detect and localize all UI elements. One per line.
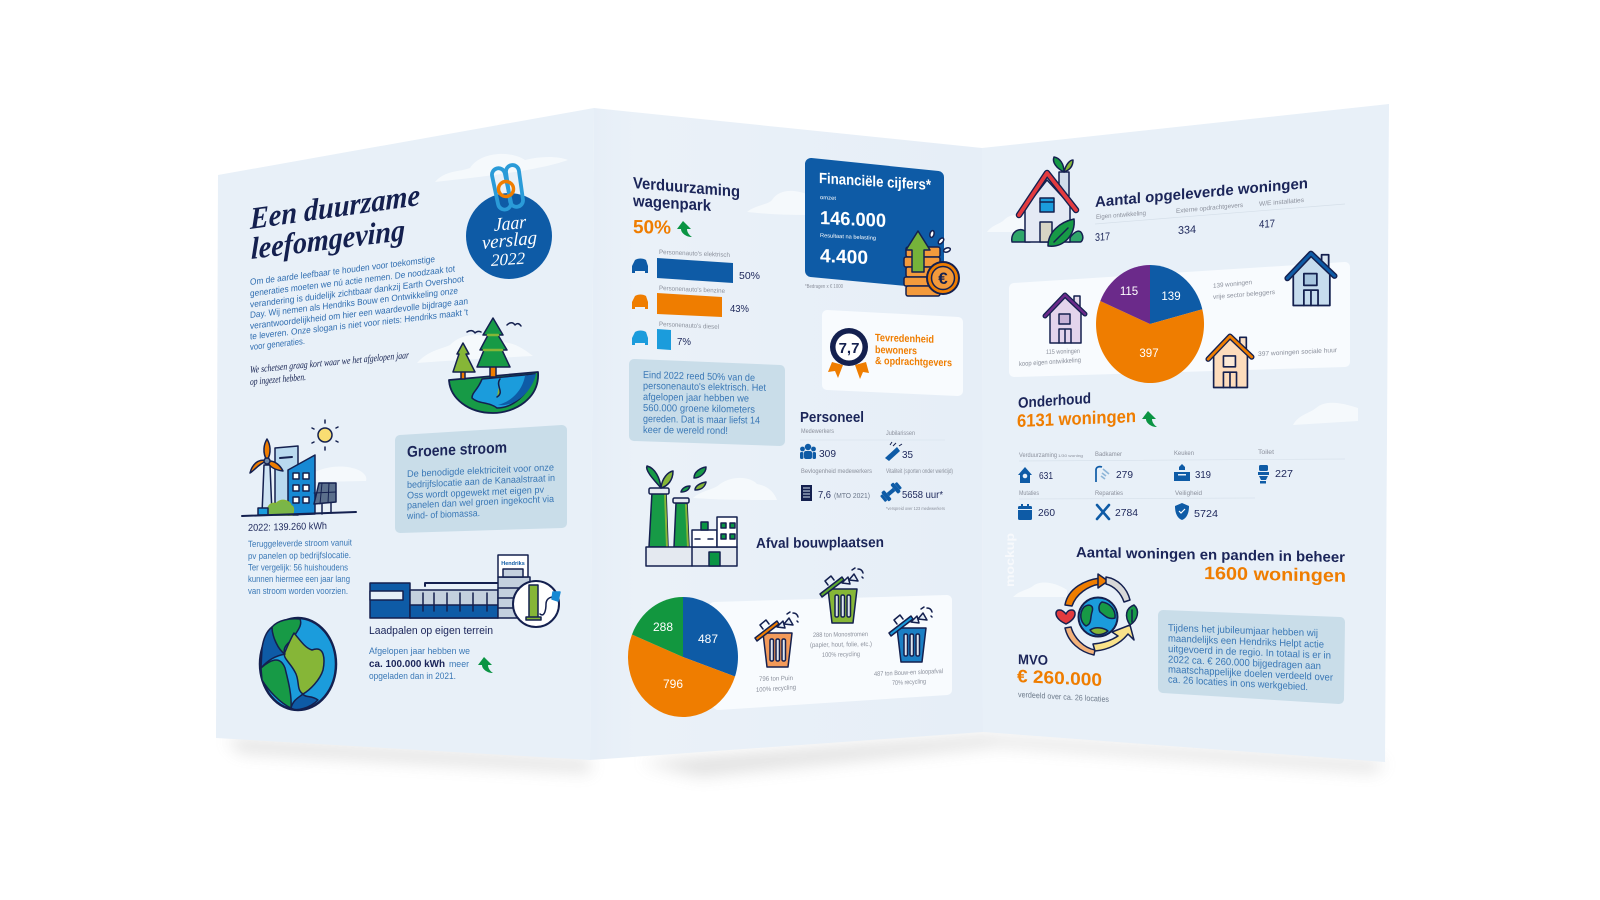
panel: Financiële cijfers: 146.000 [820, 208, 886, 232]
title: Een duurzame [249, 177, 420, 236]
title: leefomgeving [251, 212, 405, 266]
title [249, 177, 420, 266]
text: Laadpalen: opgeladen dan in 2021. [369, 671, 456, 682]
bar chart: wagenpark: Personenauto's diesel [659, 321, 720, 331]
badge: Jaarverslag 2022: 2022 [491, 249, 525, 270]
section: Personeel: *verspreid over 123 medewerkers [886, 506, 946, 511]
bar chart: wagenpark [632, 249, 760, 350]
icon: growth arrow [478, 657, 493, 673]
text: Laadpalen: Laadpalen op eigen terrein [369, 625, 493, 637]
section: Personeel: Vitaliteit (sporten onder werktijd) [886, 469, 953, 475]
panel: right page [982, 104, 1389, 762]
waste labels [756, 631, 943, 694]
heading: woningen in beheer: 1600 woningen [1204, 563, 1346, 586]
badge: Jaarverslag 2022 [466, 164, 552, 279]
section: Personeel: 5658 uur* [902, 489, 943, 501]
panel: Financiële cijfers: Resultaat na belasting [820, 233, 876, 242]
intro text: Om de aarde leefbaar te houden voor toekomstige [250, 254, 435, 287]
watermark: mockup: mockup [1003, 533, 1017, 587]
waste labels: 796 ton Puin [759, 675, 793, 683]
stats: opgeleverde woningen: 317 [1095, 231, 1110, 244]
intro text: verandering is duidelijk zichtbaar dankzij Earth Overshoot [250, 274, 464, 309]
bar chart: wagenpark: 7% [677, 336, 691, 348]
icon: dumbbell [879, 480, 903, 504]
icon: calendar [1018, 504, 1032, 520]
heading: Afval bouwplaatsen: Afval bouwplaatsen [756, 535, 884, 552]
text: Laadpalen [369, 625, 493, 682]
panel: Hendriks Helpt note: ca. 26 locaties in ons werkgebied. [1168, 675, 1308, 693]
table: onderhoud [1018, 450, 1345, 520]
table: onderhoud: Toilet [1258, 450, 1274, 456]
text: energy return: kunnen hiermee een jaar lang [248, 574, 350, 584]
icon: survey document [801, 485, 812, 501]
text: energy return [248, 521, 352, 596]
icon: shield [1175, 503, 1189, 520]
panel: electric kilometres note: 560.000 groene kilometers [643, 403, 755, 416]
waste labels: 100% recycling [756, 684, 796, 694]
panel: Groene stroom: Oss wordt opgewekt met eigen pv [407, 485, 544, 501]
heading: Onderhoud [1017, 390, 1136, 431]
icon: coins with arrow: € [938, 269, 948, 288]
heading: MVO: € 260.000 [1017, 666, 1102, 690]
icon: growth arrow [1142, 411, 1157, 427]
table: onderhoud: 1/30 woning [1058, 453, 1083, 458]
badge: Jaarverslag 2022: Jaar [494, 212, 527, 236]
table: onderhoud: Keuken [1174, 451, 1194, 457]
pie chart: waste [628, 597, 738, 717]
panel: Groene stroom: Groene stroom [407, 440, 507, 461]
heading: Onderhoud: 6131 woningen [1017, 406, 1136, 431]
panel: Hendriks Helpt note: 2022 ca. € 260.000 bijgedragen aan [1168, 655, 1321, 672]
heading: Verduurzaming wagenpark: wagenpark [632, 193, 711, 215]
table: onderhoud: 227 [1275, 468, 1293, 480]
panel: Groene stroom [400, 430, 562, 528]
pie chart: waste: 288 [653, 620, 673, 634]
icon: bath [1174, 464, 1190, 481]
icon: sustainable house [1012, 157, 1083, 246]
panel: housing types [1014, 254, 1345, 388]
section: Personeel [800, 409, 953, 511]
pie chart: waste: 796 [663, 677, 683, 691]
table: onderhoud: 319 [1195, 469, 1211, 481]
panel: middle page [590, 108, 983, 760]
text: energy return: van stroom worden voorzien. [248, 586, 348, 596]
panel: waste [628, 568, 947, 717]
pie chart: waste: 487 [698, 632, 718, 646]
panel: Hendriks Helpt note: maatschappelijke doelen verdeeld over [1168, 665, 1334, 684]
pie chart: housing: 397 [1139, 348, 1159, 360]
panel: Hendriks Helpt note: uitgevoerd in de regio. In totaal is er in [1168, 644, 1331, 662]
panel: electric kilometres note [634, 364, 780, 441]
panel: Groene stroom: bedrijfslocatie aan de Kanaalstraat in [407, 473, 555, 491]
panel: left page [216, 108, 594, 760]
icon: electric car [632, 258, 648, 273]
italic note [250, 350, 409, 388]
section: Personeel: 309 [819, 448, 836, 460]
section: Personeel: 35 [902, 449, 913, 461]
icon: rating rosette: 7,7 [839, 340, 859, 357]
panel: electric kilometres note: keer de wereld rond! [643, 425, 728, 437]
icon: green factory [646, 466, 737, 566]
icon: champagne [885, 442, 902, 461]
decorative clouds [315, 154, 1358, 597]
icon: coins with arrow [904, 230, 959, 296]
panel: electric kilometres note: gereden. Dat is maar liefst 14 [643, 414, 760, 427]
bar chart: wagenpark: 50% [739, 270, 760, 282]
pie chart: housing: 115 [1120, 286, 1138, 298]
text: Laadpalen: ca. 100.000 kWh [369, 659, 445, 670]
icon: orange bin [755, 612, 798, 667]
table: onderhoud: 5724 [1194, 508, 1218, 520]
table: onderhoud: Reparaties [1095, 491, 1123, 497]
housing labels: 139 woningen [1213, 279, 1252, 290]
intro text: Day. Wij nemen als Hendriks Bouw en Ontwikkeling onze [250, 285, 458, 320]
icon: purple house [1045, 295, 1085, 343]
housing labels: vrije sector beleggers [1213, 289, 1276, 301]
footnote: bedragen: *Bedragen x € 1000 [805, 284, 843, 290]
icon: toilet [1258, 465, 1269, 484]
housing labels: koop eigen ontwikkeling [1019, 357, 1081, 368]
heading: Verduurzaming wagenpark [632, 174, 740, 239]
icon: MVO cycle [1056, 574, 1137, 655]
section: Personeel: Jubilarissen [886, 431, 915, 437]
stats: opgeleverde woningen: W/E installaties [1259, 197, 1305, 208]
pie chart: housing: 139 [1161, 291, 1181, 303]
panel: Tevredenheid: Tevredenheid [875, 332, 934, 346]
icon: people [800, 444, 816, 459]
stats: opgeleverde woningen: 334 [1178, 224, 1196, 237]
italic note: op ingezet hebben. [250, 372, 306, 388]
panel: Tevredenheid [827, 315, 958, 391]
panel: Groene stroom: wind- of biomassa. [406, 508, 480, 522]
waste labels: 70% recycling [892, 678, 926, 687]
icon: shower [1096, 467, 1109, 482]
panel: electric kilometres note: personenauto's elektrisch. Het [643, 381, 766, 394]
table: onderhoud: Badkamer [1095, 452, 1122, 458]
panel: Tevredenheid: bewoners [875, 344, 917, 357]
text: energy return: Ter vergelijk: 56 huishoudens [248, 562, 348, 572]
heading: MVO [1017, 651, 1109, 704]
icon: petrol car [632, 294, 648, 309]
text: Laadpalen: Afgelopen jaar hebben we [369, 646, 470, 657]
waste labels: 288 ton Monostromen [813, 631, 868, 639]
waste labels: (papier, hout, folie, etc.) [810, 641, 872, 649]
panel: Financiële cijfers: Financiële cijfers* [819, 170, 931, 194]
section: Personeel: Bevlogenheid medewerkers [801, 469, 872, 475]
panel: electric kilometres note: Eind 2022 reed 50% van de [643, 370, 755, 384]
icon: diesel car [632, 330, 648, 345]
intro text [250, 254, 468, 352]
panel: Financiële cijfers: 4.400 [820, 246, 868, 269]
panel: Financiële cijfers [811, 164, 938, 283]
page shadows [226, 735, 1385, 776]
stats: opgeleverde woningen [1095, 197, 1345, 244]
stats: opgeleverde woningen: 417 [1259, 218, 1275, 231]
waste labels: 487 ton Bouw-en sloopafval [874, 668, 943, 678]
icon: Hendriks building with charger: Hendriks [501, 561, 525, 567]
table: onderhoud: Veiligheid [1175, 491, 1202, 497]
table: onderhoud: 260 [1038, 507, 1055, 519]
pie chart: housing [1096, 265, 1204, 383]
heading: woningen in beheer: Aantal woningen en panden in beheer [1076, 545, 1345, 566]
heading: MVO: verdeeld over ca. 26 locaties [1018, 690, 1109, 704]
waste labels: 100% recycling [822, 651, 860, 659]
bar chart: wagenpark: Personenauto's elektrisch [659, 249, 730, 259]
panel: Hendriks Helpt note [1163, 615, 1340, 699]
icon: blue bin [889, 607, 932, 662]
text: energy return: pv panelen op bedrijfslocatie. [248, 550, 351, 561]
table: onderhoud: 631 [1039, 470, 1053, 482]
section: Personeel: (MTO 2021) [834, 493, 870, 500]
panel: electric kilometres note: afgelopen jaar hebben we [643, 392, 749, 405]
panel: Hendriks Helpt note: Tijdens het jubileumjaar hebben wij [1168, 623, 1318, 639]
text: Laadpalen: meer [449, 659, 469, 670]
panel: Groene stroom: De benodigde elektriciteit voor onze [407, 462, 554, 480]
table: onderhoud: 2784 [1115, 507, 1138, 519]
panel: Financiële cijfers: omzet [820, 195, 836, 202]
intro text: voor generaties. [250, 336, 305, 352]
panel: Hendriks Helpt note: maandelijks een Hendriks Helpt actie [1168, 634, 1324, 651]
italic note: We schetsen graag kort waar we het afgelopen jaar [250, 350, 409, 376]
table: onderhoud: Verduurzaming [1019, 453, 1057, 459]
intro text: generaties moeten we nú actie nemen. De noodzaak tot [250, 263, 455, 298]
intro text: verantwoordelijkheid om hier een waardevolle bijdrage aan [250, 296, 468, 331]
icon: blue house [1287, 254, 1335, 305]
housing labels [1019, 279, 1338, 368]
badge: Jaarverslag 2022: verslag [482, 228, 537, 254]
housing labels: 397 woningen sociale huur [1258, 347, 1338, 358]
section: Personeel: Personeel [800, 409, 864, 426]
intro text: te leveren. Onze slogan is niet voor niets: Hendriks maakt 't [250, 307, 468, 341]
icon: green bin [820, 568, 863, 623]
bar chart: wagenpark: Personenauto's benzine [659, 285, 725, 295]
stats: opgeleverde woningen: Externe opdrachtgevers [1176, 202, 1244, 215]
text: energy return: Teruggeleverde stroom vanuit [248, 537, 352, 549]
panel: Groene stroom: panelen dan wel groen ingekocht via [407, 494, 555, 511]
icon: home [1018, 467, 1032, 483]
heading: Verduurzaming wagenpark: 50% [633, 217, 671, 239]
heading: Aantal opgeleverde woningen: Aantal opgeleverde woningen [1095, 175, 1308, 211]
icon: growth arrow [677, 221, 692, 237]
icon: green energy city [242, 420, 356, 516]
section: Personeel: 7,6 [818, 489, 831, 501]
section: Personeel: Medewerkers [801, 429, 834, 435]
icon: Hendriks building with charger [370, 555, 560, 627]
icon: globe [260, 618, 336, 710]
stats: opgeleverde woningen: Eigen ontwikkeling [1096, 210, 1146, 221]
table: onderhoud: Mutaties [1019, 491, 1039, 497]
housing labels: 115 woningen [1046, 348, 1080, 356]
icon: trees on globe [449, 318, 538, 413]
icon: tools [1097, 505, 1109, 519]
panel: Tevredenheid: & opdrachtgevers [875, 355, 952, 369]
bar chart: wagenpark: 43% [730, 303, 749, 315]
text: energy return: 2022: 139.260 kWh [248, 521, 327, 534]
heading: woningen in beheer [1076, 545, 1346, 586]
heading: Onderhoud: Onderhoud [1018, 390, 1091, 412]
icon: orange house [1208, 336, 1252, 388]
heading: Verduurzaming wagenpark: Verduurzaming [633, 174, 740, 201]
sun [312, 420, 338, 450]
table: onderhoud: 279 [1116, 469, 1133, 481]
heading: MVO: MVO [1018, 651, 1048, 668]
